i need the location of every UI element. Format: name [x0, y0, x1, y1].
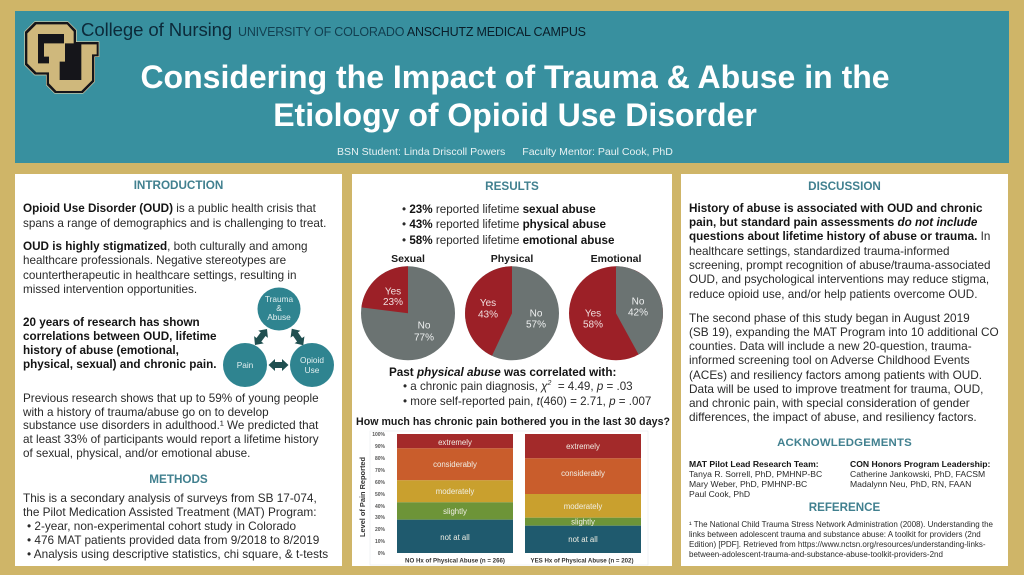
node: trauma and abuse: Abuse [267, 312, 291, 322]
text: reference: links between adolescent trauma and substance abuse: A toolkit for providers (2nd [689, 530, 981, 539]
text: discussion second paragraph: differences, the impact of abuse, and resiliency factors. [689, 410, 977, 424]
text: discussion first paragraph: reduce opioid use, and/or help patients overcome OUD. [689, 288, 977, 301]
text: previous research: Previous research shows that up to 59% of young people [23, 392, 319, 405]
arrow: trauma to opioid use [287, 325, 308, 349]
node: opioid use: Opioid [300, 355, 324, 365]
pie: sexual: 77% [414, 332, 434, 344]
pie: emotional: No [632, 296, 645, 308]
text: abuse prevalence: • 58% reported lifetime emotional abuse [402, 234, 614, 246]
text: discussion first paragraph: pain, but standard pain assessments do not include [689, 216, 977, 229]
icon: CU logo [24, 21, 100, 94]
text: previous research: substance use disorders in adulthood.¹ We predicted that [23, 419, 318, 432]
text: methods: This is a secondary analysis of surveys from SB 17-074, [23, 491, 317, 505]
node: trauma and abuse [258, 288, 300, 330]
pie: emotional: 58% [583, 320, 603, 330]
pie: physical [465, 253, 559, 360]
text: 20 years of research: history of abuse (emotional, [23, 344, 179, 357]
text: correlation heading: Past physical abuse was correlated with: [389, 366, 616, 379]
x axis labels: YES Hx of Physical Abuse (n = 202) [530, 558, 634, 564]
text: reference: ¹ The National Child Trauma Stress Network Administration (2008). Understanding the [689, 520, 993, 529]
text: honors program leadership: Madalynn Neu, PhD, RN, FAAN [850, 479, 971, 489]
text: correlation statistics [403, 380, 651, 408]
bar: history of physical abuse [525, 434, 641, 553]
text: abuse prevalence: • 23% reported lifetime sexual abuse [402, 202, 596, 216]
pie: physical: 57% [526, 320, 546, 330]
bar: history of physical abuse: moderately [564, 502, 602, 511]
heading: introduction: INTRODUCTION [134, 179, 223, 192]
text: previous research: with a history of trauma/abuse go on to develop [23, 406, 269, 418]
pie charts [361, 253, 663, 360]
text: discussion first paragraph: OUD, and psychological interventions may reduce stigma, [689, 273, 989, 286]
panel: discussion, acknowledgements and reference [681, 174, 1008, 566]
y axis: 100% [372, 432, 386, 438]
chart title: How much has chronic pain bothered you in the last 30 days? [356, 416, 670, 428]
text: methods: • 2-year, non-experimental cohort study in Colorado [27, 519, 296, 533]
text: discussion first paragraph: questions about lifetime history of abuse or trauma. In [689, 230, 990, 243]
x axis labels: NO Hx of Physical Abuse (n = 266) [405, 558, 505, 564]
y axis: 10% [375, 539, 386, 545]
text: research team: Tanya R. Sorrell, PhD, PMHNP-BC [689, 469, 822, 479]
node: pain: Pain [237, 360, 254, 370]
text: OUD definition: spans a range of demographics and is challenging to treat. [23, 216, 326, 230]
pie: sexual: No [418, 320, 431, 332]
text: discussion first paragraph [689, 202, 990, 301]
bar: no history of physical abuse: not at all [440, 533, 470, 542]
y axis: 20% [375, 527, 386, 533]
text: discussion second paragraph: (ACEs) and resiliency factors among patients with OUD. [689, 368, 982, 382]
text: previous research: of sexual, physical, and/or emotional abuse. [23, 447, 250, 460]
text: methods: the Pilot Medication Assisted Treatment (MAT) Program: [23, 505, 316, 519]
text: methods: • 476 MAT patients provided data from 9/2018 to 8/2019 [27, 533, 319, 547]
text: discussion second paragraph: The second phase of this study began in August 2019 [689, 311, 970, 325]
node: opioid use: Use [305, 365, 320, 375]
y axis title: Level of Pain Reported [358, 456, 367, 537]
text: abuse prevalence: • 43% reported lifetime physical abuse [402, 218, 606, 231]
text: discussion second paragraph: and chronic pain, with special consideration of gender [689, 396, 970, 410]
pie: physical: No [530, 308, 543, 320]
node: trauma and abuse: & [276, 303, 282, 313]
text: reference: between-adolescent-trauma-and-substance-abuse-toolkit-providers-2nd [689, 550, 943, 559]
y axis: 40% [375, 504, 386, 510]
node: opioid use [290, 343, 334, 387]
university name: UNIVERSITY OF COLORADO ANSCHUTZ MEDICAL CAMPUS [238, 25, 586, 39]
text: reference [689, 520, 993, 559]
text: research team [689, 459, 822, 499]
text: previous research: at least 33% of participants would report a lifetime history [23, 433, 319, 446]
authors: BSN Student: Linda Driscoll Powers Faculty Mentor: Paul Cook, PhD [337, 146, 673, 158]
text: research team: Mary Weber, PhD, PMHNP-BC [689, 479, 807, 489]
text: correlation statistics: • a chronic pain diagnosis, χ2 = 4.49, p = .03 [403, 380, 633, 393]
text: honors program leadership: CON Honors Program Leadership: [850, 459, 990, 469]
pie: physical: 43% [478, 310, 498, 320]
heading: reference: REFERENCE [809, 501, 880, 514]
header banner [15, 11, 1009, 163]
bar: no history of physical abuse: extremely [438, 438, 472, 447]
panel: introduction and methods [15, 174, 342, 566]
title [140, 59, 890, 133]
text: discussion second paragraph [689, 311, 999, 424]
pie: sexual [361, 253, 455, 360]
y axis: 90% [375, 444, 386, 450]
heading: results: RESULTS [485, 180, 539, 193]
diagram: trauma, pain and opioid use cycle [223, 288, 334, 387]
arrow: pain to opioid use [268, 359, 288, 371]
text: honors program leadership [850, 459, 990, 489]
y axis: 30% [375, 515, 386, 521]
text: 20 years of research: 20 years of research has shown [23, 316, 200, 329]
bar: no history of physical abuse: slightly [443, 507, 467, 516]
text: 20 years of research [23, 316, 217, 371]
text: OUD definition [23, 202, 326, 230]
text: discussion second paragraph: (SB 19), expanding the MAT Program into 10 additional CO [689, 325, 999, 339]
title: Considering the Impact of Trauma & Abuse in the [140, 59, 890, 95]
y axis: 80% [375, 456, 386, 462]
pie: emotional: Yes [585, 308, 601, 320]
college name: College of Nursing [81, 19, 232, 40]
text: methods: • Analysis using descriptive statistics, chi square, & t-tests [27, 547, 328, 561]
text: honors program leadership: Catherine Jankowski, PhD, FACSM [850, 469, 985, 479]
text: previous research [23, 392, 319, 460]
heading: discussion: DISCUSSION [808, 180, 881, 193]
y axis: 60% [375, 480, 386, 486]
pie: emotional [569, 253, 663, 360]
bar: history of physical abuse: extremely [566, 442, 600, 451]
pie: sexual: Yes [385, 286, 401, 298]
panel: results [352, 174, 672, 566]
pie: physical: Physical [491, 253, 533, 265]
x axis labels [405, 558, 634, 564]
pie: emotional: 42% [628, 308, 648, 318]
bar: history of physical abuse: considerably [561, 469, 605, 478]
pie: sexual: 23% [383, 297, 403, 308]
stacked bar chart: chronic pain [356, 416, 670, 566]
bar: no history of physical abuse: moderately [436, 487, 474, 496]
y axis: 70% [375, 468, 386, 474]
text: research team: Paul Cook, PhD [689, 489, 750, 499]
text: abuse prevalence [402, 202, 614, 246]
bar: history of physical abuse: not at all [568, 535, 598, 544]
text: OUD definition: Opioid Use Disorder (OUD) is a public health crisis that [23, 202, 316, 214]
bar: history of physical abuse: slightly [571, 518, 595, 526]
text: discussion second paragraph: informed screening tool on Adverse Childhood Events [689, 353, 970, 367]
text: discussion first paragraph: healthcare settings, standardized trauma-informed [689, 245, 950, 258]
text: stigma: OUD is highly stigmatized, both culturally and among [23, 240, 308, 253]
text: 20 years of research: physical, sexual) and chronic pain. [23, 358, 217, 371]
text: stigma [23, 240, 308, 296]
text: research team: MAT Pilot Lead Research Team: [689, 459, 819, 469]
y axis [372, 432, 386, 557]
text: reference: Edition) [PDF]. Retrieved from https://www.nctsn.org/resources/understanding-links- [689, 540, 986, 549]
arrow: trauma to pain [250, 325, 272, 349]
bar: no history of physical abuse: considerably [433, 460, 477, 469]
text: 20 years of research: correlations between OUD, lifetime [23, 330, 217, 343]
text: stigma: healthcare professionals. Negative stereotypes are [23, 254, 286, 267]
text: methods [23, 491, 328, 561]
bar: no history of physical abuse [397, 434, 513, 553]
y axis: 0% [378, 551, 386, 557]
text: discussion second paragraph: counties. Data will include a new 20-question, trauma- [689, 339, 972, 353]
heading: methods: METHODS [149, 473, 208, 486]
pie: emotional: Emotional [591, 253, 641, 265]
title: Etiology of Opioid Use Disorder [273, 97, 757, 133]
y axis: 50% [375, 492, 386, 498]
text: discussion first paragraph: History of abuse is associated with OUD and chronic [689, 202, 983, 215]
text: stigma: missed intervention opportunities. [23, 283, 197, 296]
node: trauma and abuse: Trauma [265, 294, 294, 304]
text: discussion first paragraph: screening, prompt recognition of abuse/trauma-associated [689, 259, 990, 272]
heading: acknowledgements: ACKNOWLEDGEMENTS [777, 437, 912, 449]
text: correlation statistics: • more self-reported pain, t(460) = 2.71, p = .007 [403, 394, 651, 408]
text: discussion second paragraph: Data will be used to improve treatment for trauma, OUD, [689, 382, 983, 396]
pie: physical: Yes [480, 298, 496, 309]
pie: sexual: Sexual [391, 253, 425, 265]
text: stigma: countertherapeutic in healthcare settings, resulting in [23, 269, 297, 282]
